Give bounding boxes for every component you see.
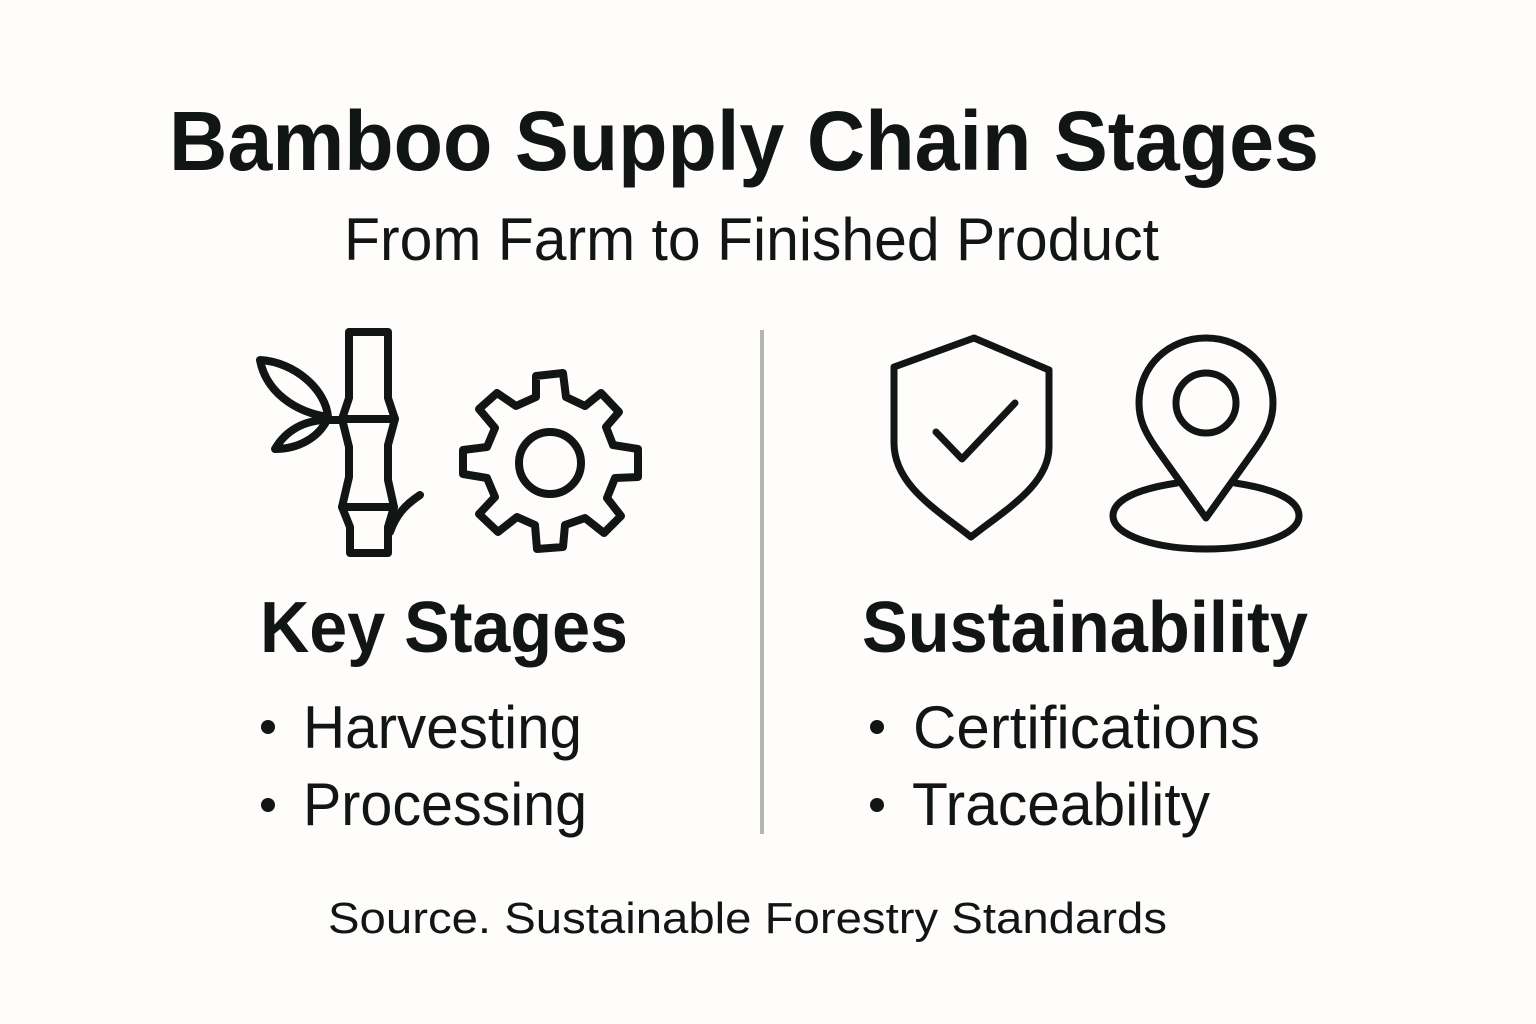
heading: key stages: Key Stages (260, 588, 628, 668)
subtitle: From Farm to Finished Product (344, 206, 1159, 273)
list item: processing: Processing (303, 771, 587, 838)
icon: gear (463, 373, 638, 549)
panel: sustainability (862, 338, 1308, 838)
list item: harvesting: Harvesting (303, 694, 582, 761)
icon: shield with check (894, 338, 1049, 537)
heading: sustainability: Sustainability (862, 588, 1308, 668)
source note: Source. Sustainable Forestry Standards (328, 894, 1167, 943)
icon: location pin (1113, 338, 1299, 549)
list item: certifications: Certifications (913, 694, 1260, 761)
panel: key stages (260, 332, 638, 838)
list item: traceability: Traceability (912, 771, 1210, 838)
title: Bamboo Supply Chain Stages (169, 94, 1319, 188)
icon: bamboo (260, 332, 420, 553)
